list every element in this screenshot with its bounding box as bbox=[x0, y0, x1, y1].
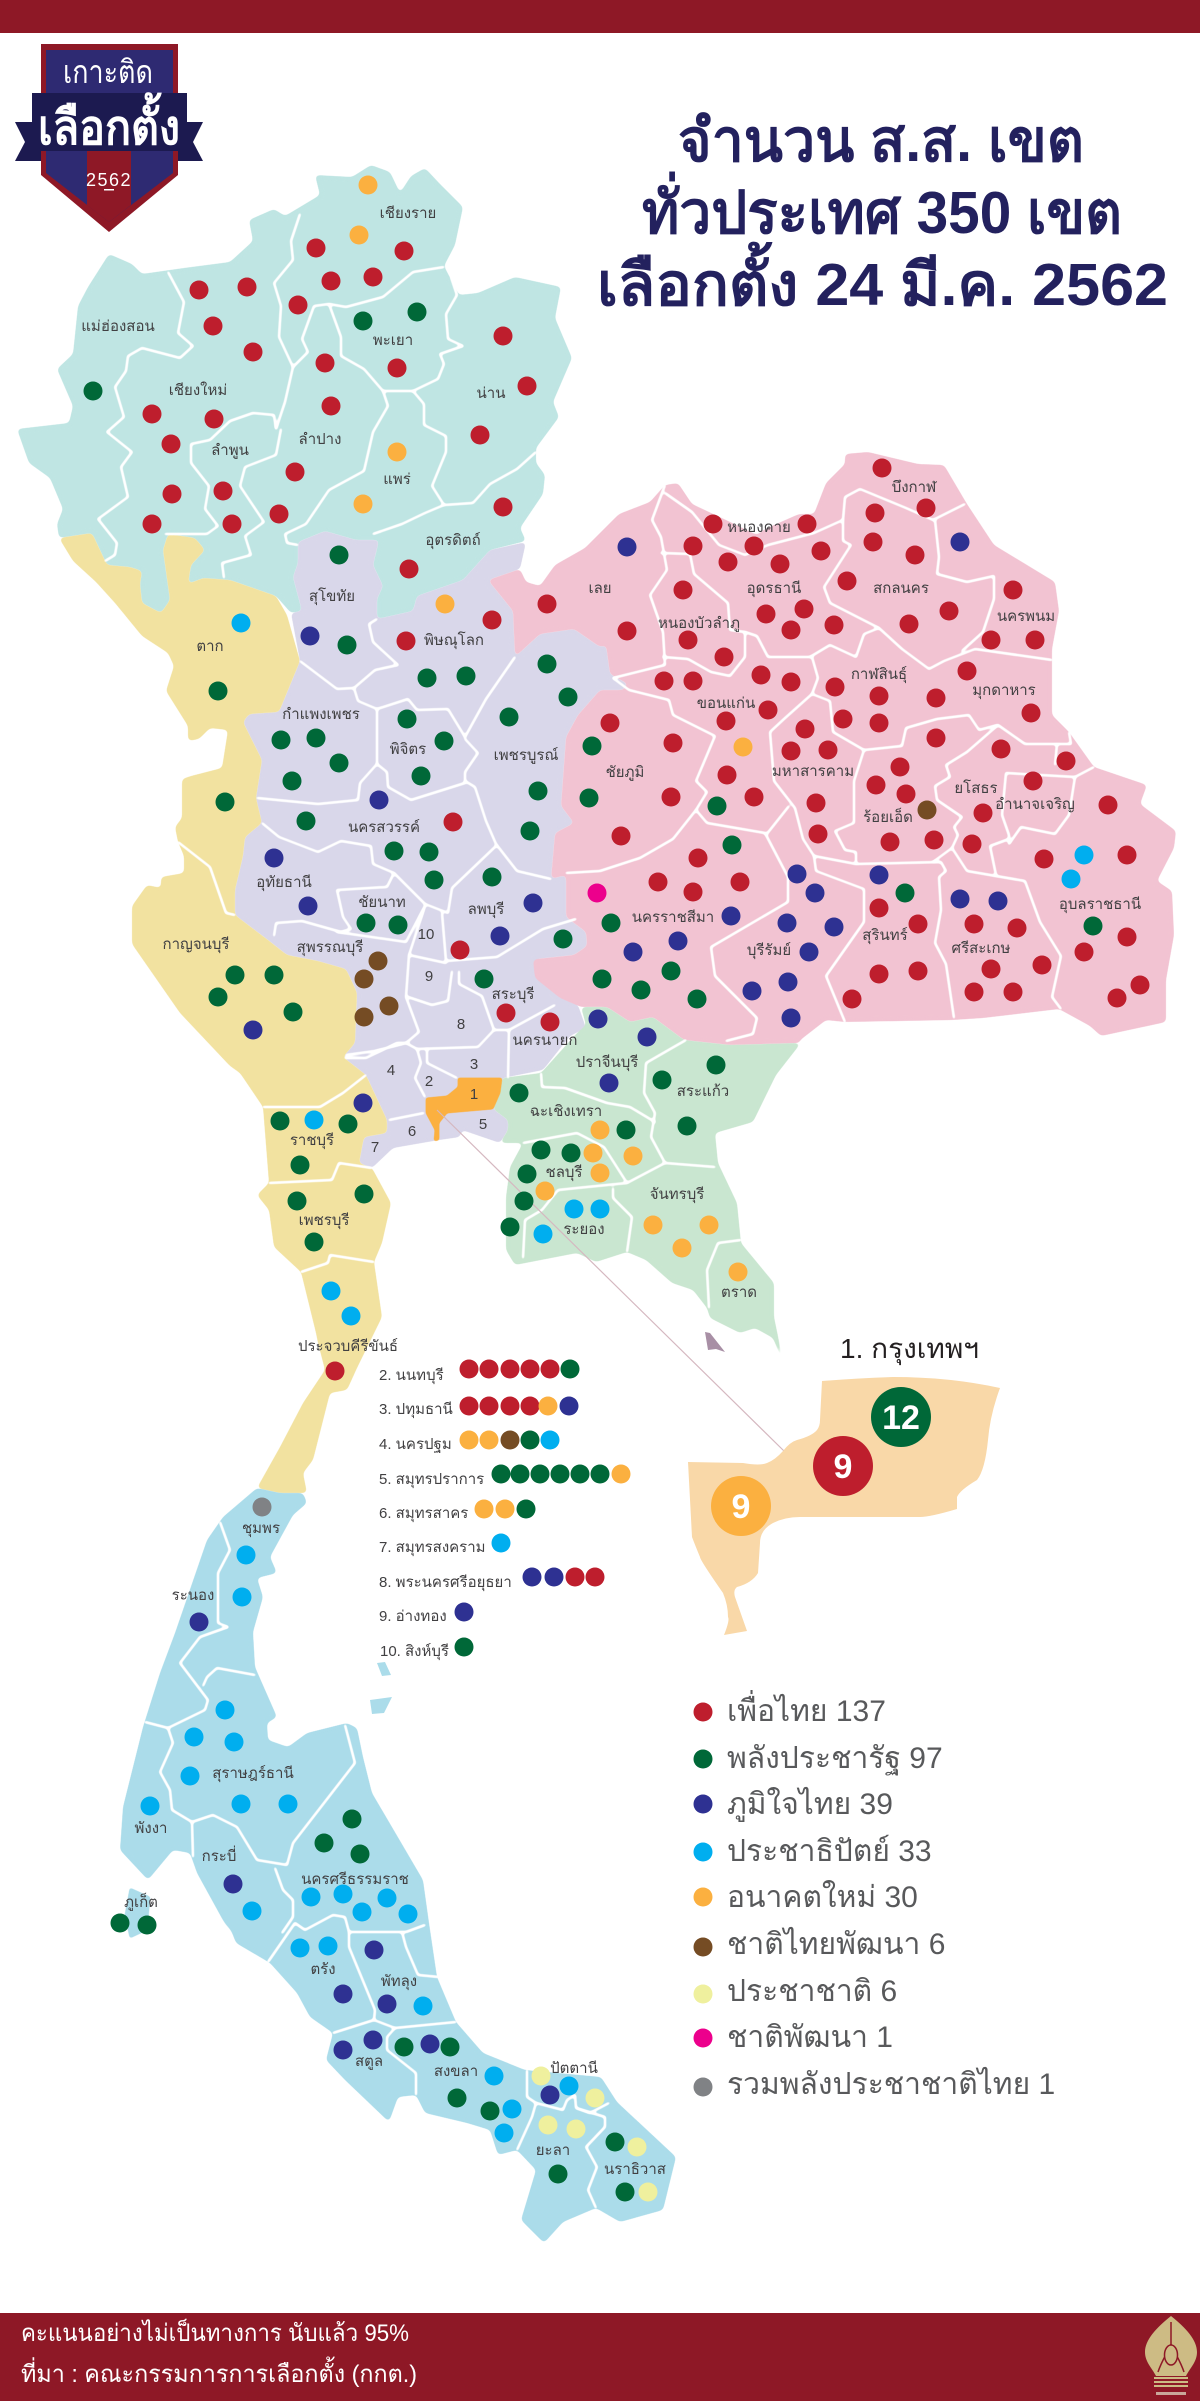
province labels: ระยอง bbox=[563, 1221, 605, 1238]
island: Phuket bbox=[125, 1888, 150, 1938]
legend: ชาติไทยพัฒนา 6 bbox=[727, 1926, 945, 1961]
province labels: 10 bbox=[418, 926, 434, 943]
legend: อนาคตใหม่ 30 bbox=[727, 1880, 918, 1914]
province labels: นครราชสีมา bbox=[632, 909, 714, 926]
province labels: ฉะเชิงเทรา bbox=[530, 1103, 602, 1120]
legend: พลังประชารัฐ 97 bbox=[727, 1742, 943, 1776]
province labels: ลำปาง bbox=[299, 431, 341, 448]
Bangkok inset bbox=[688, 1333, 1000, 1635]
list: metropolitan provinces: 10. สิงห์บุรี bbox=[380, 1643, 449, 1661]
badge logo bbox=[15, 44, 203, 232]
province labels: ขอนแก่น bbox=[697, 695, 755, 712]
inset seat circle: 9 orange bbox=[711, 1476, 771, 1536]
province labels: ระนอง bbox=[172, 1587, 214, 1604]
province labels: 9 bbox=[425, 968, 433, 985]
province labels: แพร่ bbox=[383, 471, 411, 488]
pointer line to Bangkok inset bbox=[437, 1110, 784, 1451]
province labels: ประจวบคีรีขันธ์ bbox=[298, 1338, 398, 1355]
seat dots: south bbox=[110, 1498, 658, 2202]
footer text bbox=[21, 2318, 417, 2388]
islands: Gulf bbox=[370, 1662, 392, 1714]
province labels: สุรินทร์ bbox=[862, 927, 908, 945]
list: metropolitan provinces: 5. สมุทรปราการ bbox=[379, 1471, 484, 1489]
list: metropolitan provinces: 2. นนทบุรี bbox=[379, 1367, 444, 1385]
title: เลือกตั้ง 24 มี.ค. 2562 bbox=[597, 241, 1168, 318]
province labels: ร้อยเอ็ด bbox=[863, 807, 913, 826]
province labels: ลำพูน bbox=[211, 442, 249, 459]
province labels: ชุมพร bbox=[242, 1520, 280, 1538]
province labels: อุตรดิตถ์ bbox=[425, 532, 481, 550]
region: north bbox=[17, 165, 572, 619]
title: ทั่วประเทศ 350 เขต bbox=[642, 171, 1122, 246]
region: west bbox=[59, 533, 391, 1493]
province labels: 5 bbox=[479, 1116, 487, 1133]
province labels: ปราจีนบุรี bbox=[576, 1054, 638, 1072]
province labels: กระบี่ bbox=[202, 1845, 236, 1865]
province labels: สระบุรี bbox=[492, 986, 534, 1004]
region: south bbox=[120, 1488, 676, 2243]
province labels: ราชบุรี bbox=[290, 1132, 334, 1150]
province labels: ตรัง bbox=[310, 1961, 336, 1978]
inset seat circle: 12 bbox=[871, 1387, 931, 1447]
pen nib logo bbox=[1145, 2316, 1197, 2395]
province labels: ภูเก็ต bbox=[124, 1892, 158, 1911]
province labels: ศรีสะเกษ bbox=[952, 940, 1011, 957]
list: metropolitan provinces bbox=[379, 1360, 630, 1661]
region: northeast bbox=[488, 452, 1176, 1045]
province labels: สุโขทัย bbox=[309, 587, 355, 606]
province labels: สุพรรณบุรี bbox=[297, 939, 363, 957]
seat dots: central and west bbox=[208, 546, 606, 1380]
province labels: สกลนคร bbox=[873, 580, 929, 597]
inset seat circle: 12: 12 bbox=[882, 1399, 920, 1437]
province labels: หนองบัวลำภู bbox=[658, 615, 740, 632]
province labels: ชัยภูมิ bbox=[606, 764, 644, 781]
province labels: 3 bbox=[470, 1056, 478, 1073]
province labels: อุทัยธานี bbox=[256, 874, 312, 892]
province labels: น่าน bbox=[477, 385, 505, 402]
province labels: พัทลุง bbox=[381, 1973, 417, 1991]
province labels: สระแก้ว bbox=[677, 1083, 729, 1100]
province labels: จันทรบุรี bbox=[650, 1186, 704, 1204]
footer bar bbox=[0, 2313, 1200, 2401]
province labels: มุกดาหาร bbox=[972, 682, 1036, 700]
province labels: สงขลา bbox=[434, 2063, 478, 2080]
province boundaries bbox=[98, 214, 1094, 2208]
list: metropolitan provinces: 8. พระนครศรีอยุธยา bbox=[379, 1574, 512, 1592]
province labels: พิจิตร bbox=[390, 741, 426, 758]
legend bbox=[694, 1690, 1055, 2101]
legend: ประชาชาติ 6 bbox=[727, 1975, 897, 2008]
seat dots: north bbox=[84, 176, 536, 578]
province labels: 7 bbox=[371, 1139, 379, 1156]
province labels: สุราษฎร์ธานี bbox=[212, 1765, 294, 1783]
province labels: 8 bbox=[457, 1016, 465, 1033]
province labels: 2 bbox=[425, 1073, 433, 1090]
province labels: แม่ฮ่องสอน bbox=[81, 318, 155, 335]
province labels: ยะลา bbox=[536, 2142, 570, 2159]
province labels: นครสวรรค์ bbox=[348, 819, 420, 836]
list: metropolitan provinces: 9. อ่างทอง bbox=[379, 1608, 447, 1625]
province labels: เชียงราย bbox=[380, 205, 436, 222]
province labels: ปัตตานี bbox=[550, 2060, 598, 2077]
province labels: 4 bbox=[387, 1062, 395, 1079]
inset seat circle: 9 orange: 9 bbox=[732, 1488, 750, 1526]
province labels: เพชรบุรี bbox=[299, 1212, 349, 1230]
province labels: นราธิวาส bbox=[604, 2161, 666, 2178]
island: Ko Kut bbox=[705, 1332, 725, 1352]
legend: รวมพลังประชาชาติไทย 1 bbox=[727, 2066, 1055, 2101]
province labels: อุดรธานี bbox=[747, 580, 801, 598]
badge logo: เลือกตั้ง bbox=[38, 92, 180, 155]
list: metropolitan provinces: 3. ปทุมธานี bbox=[379, 1401, 453, 1419]
legend: ภูมิใจไทย 39 bbox=[727, 1786, 893, 1822]
inset seat circle: 9 red: 9 bbox=[834, 1448, 852, 1486]
province labels: อุบลราชธานี bbox=[1059, 896, 1141, 914]
province labels: กาฬสินธุ์ bbox=[851, 666, 907, 684]
top bar bbox=[0, 0, 1200, 33]
province labels: พะเยา bbox=[373, 332, 413, 349]
inset map bbox=[688, 1377, 1000, 1635]
province labels: สตูล bbox=[355, 2053, 383, 2070]
province labels: ชัยนาท bbox=[358, 894, 406, 911]
inset seat circle: 9 red bbox=[813, 1436, 873, 1496]
province labels: อำนาจเจริญ bbox=[995, 796, 1075, 813]
province labels: กาญจนบุรี bbox=[163, 936, 229, 954]
province labels: หนองคาย bbox=[727, 519, 791, 536]
province labels: มหาสารคาม bbox=[772, 763, 854, 780]
region: east bbox=[493, 1007, 801, 1370]
province labels: 1 bbox=[470, 1086, 478, 1103]
seat dots: northeast bbox=[592, 458, 1150, 1028]
province labels: เลย bbox=[588, 580, 612, 597]
province labels: เพชรบูรณ์ bbox=[494, 747, 558, 764]
badge logo: 2562 bbox=[86, 170, 132, 190]
province labels: 6 bbox=[408, 1123, 416, 1140]
seat dots: east bbox=[500, 1010, 748, 1282]
inset title: 1. กรุงเทพฯ bbox=[840, 1333, 979, 1366]
title bbox=[597, 108, 1168, 318]
footer text: ที่มา : คณะกรรมการการเลือกตั้ง (กกต.) bbox=[21, 2356, 417, 2388]
list: metropolitan provinces: 6. สมุทรสาคร bbox=[379, 1505, 468, 1523]
legend: ประชาธิปัตย์ 33 bbox=[727, 1834, 932, 1868]
province labels: บึงกาฬ bbox=[892, 479, 937, 496]
badge logo: เกาะติด bbox=[63, 54, 153, 90]
title: จำนวน ส.ส. เขต bbox=[678, 108, 1084, 174]
province labels: ยโสธร bbox=[954, 779, 998, 797]
province labels: พังงา bbox=[135, 1820, 167, 1837]
province labels: ชลบุรี bbox=[546, 1164, 582, 1182]
region: Bangkok bbox=[426, 1078, 502, 1141]
province labels: นครศรีธรรมราช bbox=[301, 1871, 409, 1888]
list: metropolitan provinces: 4. นครปฐม bbox=[379, 1436, 452, 1453]
province labels bbox=[81, 205, 1141, 2178]
province labels: นครพนม bbox=[997, 608, 1055, 625]
province labels: บุรีรัมย์ bbox=[747, 942, 791, 960]
legend: เพื่อไทย 137 bbox=[727, 1690, 886, 1728]
province labels: กำแพงเพชร bbox=[282, 706, 360, 723]
list: metropolitan provinces: 7. สมุทรสงคราม bbox=[379, 1539, 486, 1557]
province labels: เชียงใหม่ bbox=[169, 381, 227, 399]
region: central bbox=[235, 531, 628, 1168]
province labels: ลพบุรี bbox=[468, 901, 504, 919]
province labels: นครนายก bbox=[513, 1032, 577, 1049]
legend: ชาติพัฒนา 1 bbox=[727, 2021, 893, 2054]
province labels: ตราด bbox=[721, 1284, 757, 1301]
province labels: พิษณุโลก bbox=[424, 631, 484, 650]
footer text: คะแนนอย่างไม่เป็นทางการ นับแล้ว 95% bbox=[21, 2318, 409, 2347]
province labels: ตาก bbox=[196, 638, 224, 655]
